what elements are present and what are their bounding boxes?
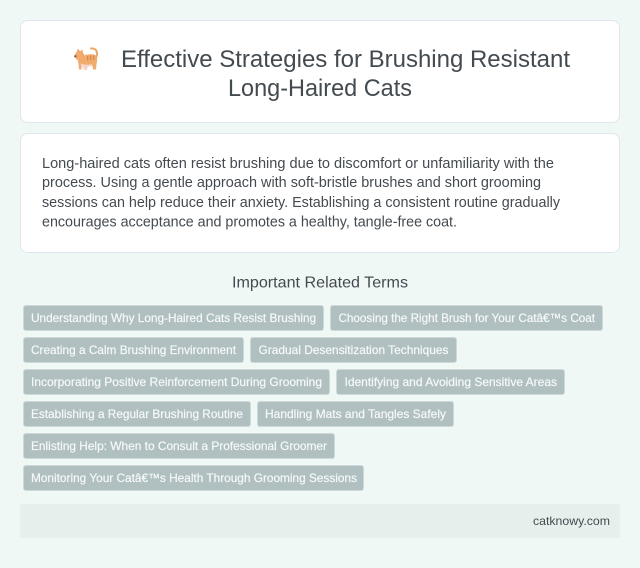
tag 10: Monitoring Your Catâ€™s Health Through Grooming Sessions bbox=[31, 471, 357, 485]
tag 3 bbox=[24, 338, 244, 362]
title: Long-Haired Cats bbox=[228, 75, 412, 102]
tag 10 bbox=[24, 466, 364, 490]
title: Effective Strategies for Brushing Resistant bbox=[121, 46, 570, 73]
footer: catknowy.com bbox=[533, 514, 610, 528]
tag 2 bbox=[330, 306, 602, 330]
tag 5: Incorporating Positive Reinforcement During Grooming bbox=[31, 375, 322, 389]
tag 4 bbox=[250, 338, 456, 362]
tag 6: Identifying and Avoiding Sensitive Areas bbox=[344, 375, 557, 389]
text block: description: process. Using a gentle approach with soft-bristle brushes and short grooming bbox=[42, 175, 541, 191]
tag 5 bbox=[24, 370, 330, 394]
tag 8 bbox=[258, 402, 454, 426]
tag 9: Enlisting Help: When to Consult a Professional Groomer bbox=[31, 439, 327, 453]
tag 8: Handling Mats and Tangles Safely bbox=[265, 407, 446, 421]
text block: description: sessions can help reduce their anxiety. Establishing a consistent routine gradually bbox=[42, 195, 561, 211]
text block: description bbox=[42, 156, 561, 230]
tag 6 bbox=[336, 370, 564, 394]
tag list bbox=[24, 306, 602, 490]
heading: related terms: Important Related Terms bbox=[232, 274, 408, 292]
panel: description bbox=[20, 134, 620, 252]
title bbox=[121, 46, 570, 102]
panel: title card bbox=[20, 20, 620, 122]
tag 1: Understanding Why Long-Haired Cats Resist Brushing bbox=[31, 311, 316, 325]
tag 1 bbox=[24, 306, 324, 330]
footer bbox=[20, 504, 620, 538]
tag 4: Gradual Desensitization Techniques bbox=[258, 343, 448, 357]
text block: description: Long-haired cats often resist brushing due to discomfort or unfamiliarity with the bbox=[42, 156, 554, 172]
tag 2: Choosing the Right Brush for Your Catâ€™s Coat bbox=[338, 311, 596, 325]
tag 9 bbox=[24, 434, 334, 458]
icon: cat bbox=[74, 48, 97, 70]
text block: description: encourages acceptance and promotes a healthy, tangle-free coat. bbox=[42, 214, 457, 230]
tag 7 bbox=[24, 402, 250, 426]
tag 7: Establishing a Regular Brushing Routine bbox=[31, 407, 243, 421]
tag 3: Creating a Calm Brushing Environment bbox=[31, 343, 237, 357]
